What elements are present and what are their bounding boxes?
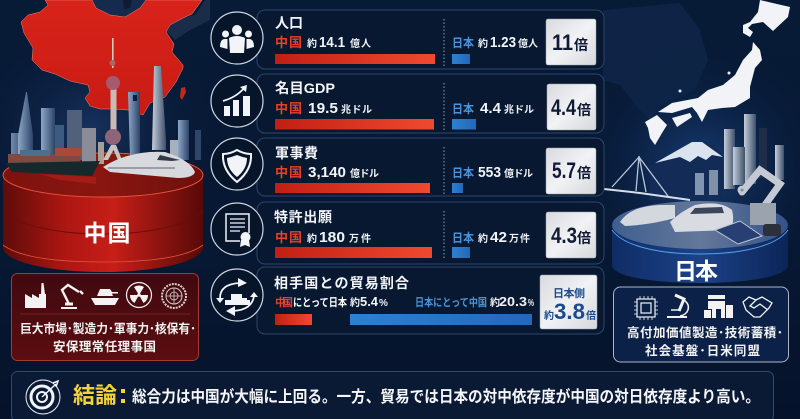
conclusion text: 総合力は中国が大幅に上回る。一方、貿易では日本の対中依存度が中国の対日依存度より高い。 [132,387,760,406]
row: population: 約 [307,37,317,50]
pedestal: China [3,153,203,272]
multiplier: population [546,19,596,65]
conclusion colon [121,389,125,403]
row: patents: 中国 [275,230,302,245]
row: military spending: 中国 [275,165,302,180]
icon: factory [25,283,46,308]
row: military spending: 日本 [452,165,474,180]
vehicles and solar panel: Japan [620,203,781,244]
row: trade share: % [528,298,534,309]
row: patents: 万件 [349,232,371,245]
row: GDP [211,74,604,133]
row: trade share: にとって日本 [293,295,347,309]
map: China [21,0,210,115]
row: patents: 日本 [452,230,474,245]
row: GDP: 兆ドル [504,103,534,116]
row: population: 億人 [350,37,371,50]
skyline: Shanghai [11,66,201,164]
icon: handshake [743,297,772,317]
icon: people [211,12,263,64]
row: trade share: 中国 [275,295,293,309]
conclusion heading: 結論 [73,383,117,408]
panel: China strengths [12,274,198,360]
pedestal label: Japan: 日本 [674,258,718,284]
multiplier: trade share [540,275,597,329]
multiplier: trade share: 3.8 [554,299,585,324]
icon: UN emblem [162,284,186,308]
row: population: 1.23 [490,34,516,51]
row: population [211,10,604,69]
row: military spending: 3,140 [308,164,346,181]
row: trade share: 日本にとって中国 [415,295,487,309]
row: trade share: 20.3 [499,294,527,309]
panel: Japan strengths [614,287,788,362]
row: GDP: 兆ドル [341,103,372,116]
row: population: 約 [478,37,488,50]
multiplier: military spending [546,148,596,194]
row: military spending: 553 [478,164,501,181]
row: population: 14.1 [319,34,345,51]
panel: China strengths: 安保理常任理事国 [53,339,156,354]
multiplier: GDP [547,84,596,130]
conclusion banner [12,372,774,419]
skyline: Japan with Mount Fuji and bridge [604,114,784,200]
row: military spending: 億ドル [350,167,379,180]
icon: trade cycle [211,269,263,321]
multiplier: military spending: 5.7 [552,158,576,183]
multiplier: military spending: 倍 [577,165,591,181]
multiplier: GDP: 倍 [577,102,591,118]
row: population: 中国 [275,35,302,50]
row: patents: 42 [490,229,507,246]
row: trade share: 約 [350,296,360,309]
row: patents: 約 [478,232,488,245]
label: GDP: 名目GDP [275,80,335,96]
Oriental Pearl Tower [103,38,122,160]
row: trade share: 約 [490,296,500,309]
icon: microscope [667,295,688,317]
row: patents [211,202,604,264]
row: GDP: 4.4 [480,100,502,117]
row: population: 日本 [452,35,474,50]
row: patents: 万件 [509,232,530,245]
label: trade share: 相手国との貿易割合 [274,275,409,291]
multiplier: population: 倍 [574,37,588,53]
row: trade share: % [379,298,388,309]
panel text: China: 巨大市場･製造力･軍事力･核保有･ [20,321,196,336]
icon: certificate [211,203,263,255]
row: population: 億人 [518,37,538,50]
row: military spending [211,138,604,196]
row: GDP: 中国 [275,101,302,116]
icon: shield [211,138,263,190]
row: military spending: 億ドル [504,167,533,180]
row: trade share [211,267,604,334]
icon: buildings [704,295,733,318]
icon: chart [211,75,263,127]
label: military spending: 軍事費 [275,145,318,161]
icon: tank [91,289,119,305]
map: Japan [603,0,790,145]
multiplier: patents: 倍 [577,230,591,246]
row: GDP: 19.5 [308,100,338,117]
label: patents: 特許出願 [274,209,332,225]
row: patents: 約 [307,232,317,245]
row: patents: 180 [319,229,345,246]
panel text: Japan: 高付加価値製造･技術蓄積･ [627,325,783,340]
row: trade share: 5.4 [360,294,379,309]
pedestal: Japan [612,201,788,284]
row: GDP: 日本 [452,101,474,116]
container ship [6,148,100,184]
multiplier: patents [546,212,596,258]
icon: radiation [126,282,152,308]
bullet train: China [103,152,195,178]
icon: chip [634,296,658,320]
panel: Japan strengths: 社会基盤･日米同盟 [645,343,760,358]
multiplier: population: 11 [552,30,573,55]
icon: target [26,380,60,414]
multiplier: patents: 4.3 [551,223,577,248]
robot arm [739,170,780,205]
label: population: 人口 [275,15,303,31]
multiplier: GDP: 4.4 [551,95,577,120]
multiplier: trade share: 日本側 [553,286,585,300]
pedestal label: China: 中国 [84,220,130,246]
icon: robot arm [61,285,83,308]
multiplier: trade share: 約 [544,309,554,322]
multiplier: trade share: 倍 [586,309,596,322]
